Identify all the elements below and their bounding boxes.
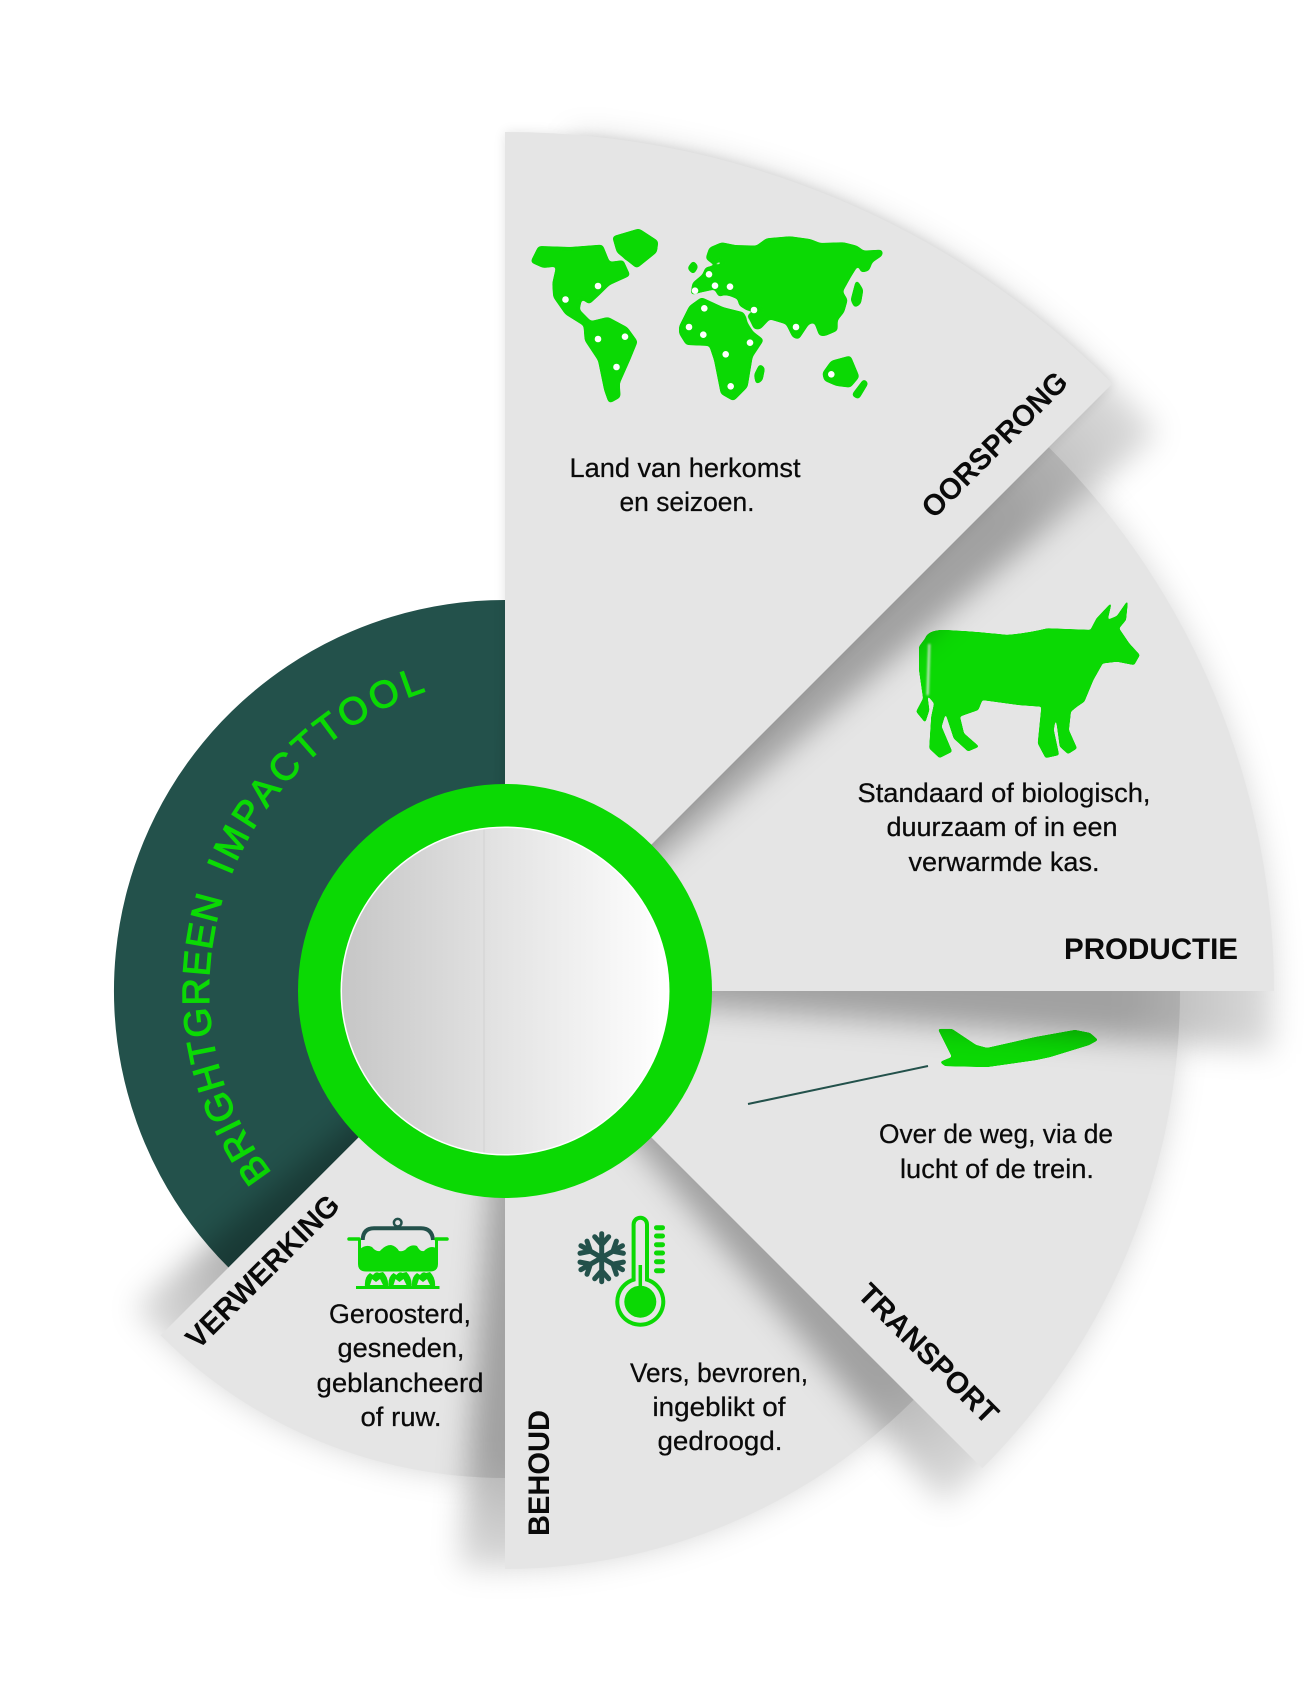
label: oorsprong: OORSPRONG — [916, 366, 1075, 525]
icon: cooking pot — [349, 1219, 447, 1288]
text: transport — [879, 1119, 1113, 1184]
curved title: BRIGHTGREEN IMPACTTOOL — [182, 670, 426, 1187]
panel: oorsprong — [505, 132, 1112, 991]
text: productie — [858, 778, 1150, 877]
icon: cow — [916, 600, 1140, 758]
icon: airplane with trail — [748, 1029, 1098, 1104]
text: behoud: Vers, bevroren, — [630, 1358, 808, 1388]
panel: productie — [505, 447, 1274, 991]
text: productie: duurzaam of in een — [886, 812, 1118, 842]
text: oorsprong — [570, 453, 801, 517]
icon: snowflake and thermometer — [577, 1218, 663, 1325]
text: behoud: ingeblikt of — [652, 1392, 786, 1422]
text: productie: verwarmde kas. — [908, 847, 1100, 877]
text: behoud: gedroogd. — [658, 1426, 782, 1456]
label: verwerking: VERWERKING — [180, 1189, 346, 1355]
centre disk — [340, 826, 670, 1156]
text: verwerking — [316, 1299, 484, 1432]
text: oorsprong: en seizoen. — [620, 487, 754, 517]
panel: verwerking — [161, 991, 505, 1478]
text: verwerking: of ruw. — [360, 1402, 442, 1432]
icon: world map — [532, 230, 882, 402]
text: behoud — [630, 1358, 808, 1456]
label: productie: PRODUCTIE — [1064, 933, 1238, 966]
label: behoud: BEHOUD — [523, 1410, 556, 1536]
centre ring — [298, 784, 712, 1198]
text: transport: Over de weg, via de — [879, 1119, 1113, 1149]
text: transport: lucht of de trein. — [900, 1154, 1094, 1184]
panel: behoud — [505, 991, 914, 1569]
text: verwerking: gesneden, — [338, 1333, 464, 1363]
panel: brightgreen impacttool — [114, 600, 505, 1268]
text: oorsprong: Land van herkomst — [570, 453, 801, 483]
text: verwerking: geblancheerd — [316, 1368, 484, 1398]
text: verwerking: Geroosterd, — [329, 1299, 471, 1329]
label: transport: TRANSPORT — [851, 1277, 1005, 1431]
text: productie: Standaard of biologisch, — [858, 778, 1150, 808]
panel: transport — [505, 991, 1180, 1468]
